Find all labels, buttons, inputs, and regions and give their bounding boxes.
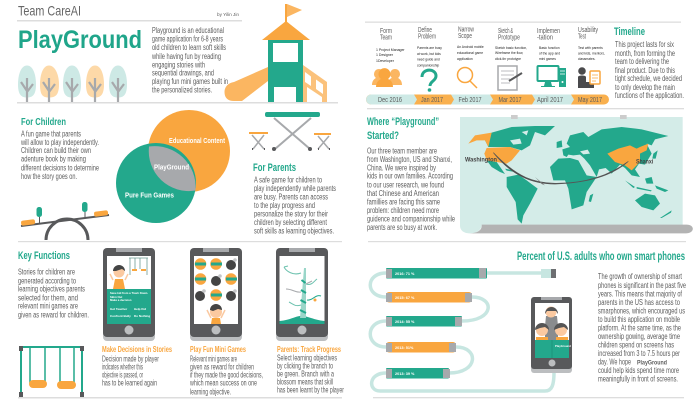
- timeline step: sketch and prototype: Prototype: [498, 34, 520, 42]
- text: For Children: Children can build their own: [21, 146, 91, 155]
- text: where started: kids in our own families. According: [367, 172, 453, 180]
- timeline step: sketch and prototype: Sketch &: [498, 28, 513, 35]
- text: where started: Our three team member are: [367, 146, 437, 156]
- text: For Parents: play independently while parents: [254, 184, 336, 193]
- timeline step: define problem: at work, but kids: [417, 52, 441, 56]
- phone: make decisions: Skim Out: [110, 295, 122, 299]
- timeline date bar: Jan 2017: [421, 95, 443, 104]
- phone: mini games: [190, 248, 242, 341]
- text: where started: that Chinese and American: [367, 189, 439, 198]
- text: For Children: A fun game that parents: [21, 130, 81, 138]
- text: For Parents: children by selecting different: [254, 218, 328, 227]
- text: where started: [367, 146, 455, 232]
- intro text: game application for 6-8 years: [152, 34, 223, 44]
- text: Timeline: final product. Due to this: [615, 66, 675, 75]
- timeline step: sketch and prototype: click-thr prototype: [495, 57, 521, 61]
- caption: mini games: learning objective.: [190, 388, 231, 396]
- text: Timeline: This project lasts for six: [615, 40, 674, 49]
- text: Key Functions: relevant mini games are: [18, 302, 78, 310]
- phone: make decisions: [103, 248, 155, 341]
- text: For Parents: [254, 176, 336, 236]
- caption: track progress: be green. Branch with a: [277, 370, 334, 378]
- text: Key Functions: given as reward for children.: [18, 310, 89, 320]
- caption: mini games: Relevant mini games are: [190, 354, 237, 364]
- text: percent paragraph: day. We hope: [598, 358, 631, 366]
- phone: make decisions: Make a decision: [110, 298, 132, 302]
- timeline step: sketch and prototype: Sketch basic function,: [495, 46, 527, 50]
- text: where started: problem: children need more: [367, 206, 439, 215]
- icon: table and stools: [249, 112, 331, 151]
- text: Key Functions: Stories for children are: [18, 268, 75, 276]
- icon: swing set: [19, 346, 84, 397]
- world map: [460, 115, 693, 233]
- caption: mini games: if they made the good decisions,: [190, 370, 263, 380]
- text: Timeline: month, from forming the: [615, 49, 675, 58]
- text: where started: guidence and companionship while: [367, 214, 455, 224]
- icon: row of trees: [18, 66, 127, 103]
- timeline step: define problem: need guide and: [417, 58, 440, 62]
- phone: make decisions: Save kid from a Trash Down.: [110, 291, 148, 295]
- caption: mini games: given as reward for children: [190, 362, 254, 372]
- venn diagram: Pure Fun Games: [125, 192, 174, 200]
- timeline step: usability test: Test: [578, 34, 586, 40]
- venn diagram: [116, 110, 230, 223]
- text: Timeline: team to delivering the: [615, 57, 669, 66]
- timeline step: sketch and prototype: Wireframe the flow,: [495, 51, 523, 55]
- phone: family reading: PlayGround: [555, 344, 571, 348]
- caption: track progress: Parents: Track Progress: [277, 345, 341, 354]
- timeline step: sketch and prototype: [495, 28, 527, 90]
- text: where started: famillies are facing this same: [367, 198, 440, 206]
- timeline step: usability test: Test with parents: [578, 46, 603, 50]
- timeline date bar: May 2017: [578, 95, 602, 104]
- intro text: [151, 26, 228, 94]
- text: Key Functions: learning objectives parents: [18, 284, 85, 294]
- timeline step: define problem: Define: [418, 27, 432, 34]
- text: For Children: will allow to play independently.: [20, 138, 99, 147]
- heading: Where Playground Started: [367, 116, 439, 142]
- icon: seesaw: [21, 202, 109, 240]
- heading: Key Functions: Key Functions: [18, 250, 70, 262]
- caption: make decisions: Decision made by player: [102, 354, 159, 364]
- text: percent paragraph: PlayGround: [637, 360, 667, 366]
- intro text: engaging stories with: [152, 60, 205, 70]
- timeline step: implementation: Implemen: [537, 28, 560, 35]
- team heading: [18, 2, 240, 18]
- timeline step: narrow scope: educational game: [457, 51, 483, 55]
- text: For Children: adenture book by making: [21, 154, 86, 164]
- text: For Parents: are busy. Parents can access: [254, 192, 328, 202]
- phone: make decisions: Get Teacher: [110, 307, 128, 311]
- text: Key Functions: [18, 268, 89, 320]
- venn diagram: Educational Content: [169, 138, 226, 145]
- timeline step: implementation: mini games: [539, 57, 556, 61]
- caption: track progress: by clicking the branch to: [277, 362, 333, 370]
- text: where started: parents are so busy at work.: [367, 223, 437, 232]
- timeline step: define problem: [417, 27, 442, 92]
- timeline step: narrow scope: An Android mobile: [457, 45, 484, 49]
- chart: smartphone ownership cable: 2015: 67 %: [395, 296, 415, 300]
- icon: play tower with slide: [224, 4, 327, 102]
- timeline step: implementation: [537, 28, 566, 87]
- phone: make decisions: Do Nothing: [134, 314, 150, 318]
- text: Key Functions: selected for them, and: [18, 294, 78, 302]
- timeline step: narrow scope: Narrow: [458, 26, 475, 34]
- caption: make decisions: has to be learned again: [102, 378, 157, 388]
- caption: track progress: Select learning objectives: [277, 354, 337, 362]
- heading: For Parents: For Parents: [253, 162, 296, 174]
- phone: make decisions: Help Kid: [134, 307, 146, 311]
- timeline step: usability test: Usability: [578, 27, 598, 34]
- timeline date bar: Mar 2017: [498, 95, 522, 104]
- timeline step: define problem: Problem: [418, 34, 436, 40]
- text: For Parents: personalize the story for their: [254, 210, 328, 218]
- timeline step: usability test: and kids, mentors,: [578, 52, 605, 56]
- text: For Parents: soft skills as learning objectives.: [254, 226, 334, 236]
- world map: Washington: [465, 156, 497, 163]
- phone: track progress: [276, 248, 328, 341]
- caption: make decisions: indicates whether this: [102, 362, 143, 372]
- intro text: the personalized stories.: [152, 86, 212, 94]
- timeline date bar: Feb 2017: [458, 95, 482, 104]
- timeline step: narrow scope: application: [457, 57, 473, 61]
- venn diagram: PlayGround: [154, 164, 189, 172]
- text: where started: from Washington, US and Shanxi,: [367, 155, 452, 164]
- chart: smartphone ownership cable: 2014: 55 %: [395, 320, 415, 324]
- timeline step: usability test: [578, 27, 605, 88]
- title: PlayGround logo: PlayGround: [18, 26, 142, 54]
- chart: smartphone ownership cable: 2013: 39 %: [395, 372, 415, 376]
- text: For Parents: to the play progress and: [254, 201, 315, 210]
- text: Timeline: [615, 40, 684, 100]
- timeline step: form team: 1Developer: [376, 59, 395, 63]
- timeline date bar: April 2017: [537, 95, 563, 104]
- team heading: by Yilin Jin: [217, 12, 240, 17]
- timeline step: define problem: companionship: [417, 64, 439, 68]
- chart: smartphone ownership cable: [370, 268, 556, 391]
- text: where started: to our user research, we found: [367, 180, 444, 190]
- chart: smartphone ownership cable: 2013: 51%: [395, 346, 414, 350]
- timeline date bar: [366, 94, 609, 104]
- text: where started: China. We were inspired by: [367, 164, 436, 172]
- intro text: sequential drawings, and: [152, 68, 214, 78]
- timeline date bar: Dec 2016: [378, 95, 402, 104]
- heading: Timeline: Timeline: [614, 26, 645, 38]
- intro text: playing fun mini games built in: [152, 77, 228, 86]
- timeline step: form team: [372, 28, 405, 87]
- caption: make decisions: Make Decisions in Stories: [102, 345, 172, 354]
- timeline step: define problem: Parents are busy: [417, 46, 442, 50]
- caption: mini games: [189, 345, 263, 396]
- timeline step: form team: Form: [380, 28, 392, 35]
- timeline step: implementation: of the app and: [539, 52, 560, 56]
- text: percent paragraph: [598, 272, 686, 384]
- caption: make decisions: objective is passed, or: [102, 370, 143, 380]
- intro text: Playground is an educational: [152, 26, 224, 35]
- heading: Where Playground Started: Where “Playground”: [367, 116, 439, 128]
- timeline step: form team: 1 Designer: [376, 53, 394, 57]
- caption: track progress: [277, 345, 344, 394]
- timeline step: usability test: classmates.: [578, 57, 595, 61]
- world map: Shanxi: [636, 158, 654, 165]
- phone: family reading: [531, 297, 572, 373]
- caption: mini games: which mean success on one: [189, 378, 257, 388]
- text: For Children: different decisions to determine: [21, 164, 99, 172]
- caption: mini games: Play Fun Mini Games: [190, 345, 246, 354]
- text: Timeline: to only develop the main: [615, 83, 675, 92]
- timeline step: narrow scope: [457, 26, 484, 88]
- intro text: while having fun by reading: [151, 52, 221, 61]
- heading: For Children: For Children: [21, 116, 66, 128]
- timeline step: form team: Team: [380, 34, 392, 42]
- timeline step: implementation: Basic function: [539, 46, 560, 50]
- chart: smartphone ownership cable: 2016: 71 %: [395, 272, 415, 276]
- heading: Where Playground Started: Started?: [367, 130, 399, 142]
- phone: make decisions: Confront Bully: [110, 314, 131, 318]
- text: For Children: how the story goes on.: [21, 172, 77, 181]
- timeline step: form team: 1 Project Manager: [376, 48, 405, 52]
- team heading: Team CareAI: [18, 2, 81, 18]
- text: Key Functions: generated according to: [18, 276, 76, 286]
- caption: make decisions: [102, 345, 172, 388]
- text: For Parents: A safe game for children to: [254, 176, 322, 184]
- caption: track progress: blossom means that skill: [277, 378, 333, 386]
- intro text: old children to learn soft skills: [152, 43, 226, 52]
- caption: track progress: has been learnt by the player: [277, 386, 344, 394]
- timeline step: implementation: -tation: [537, 34, 553, 42]
- timeline step: narrow scope: Scope: [458, 33, 472, 40]
- text: For Children: [20, 130, 99, 181]
